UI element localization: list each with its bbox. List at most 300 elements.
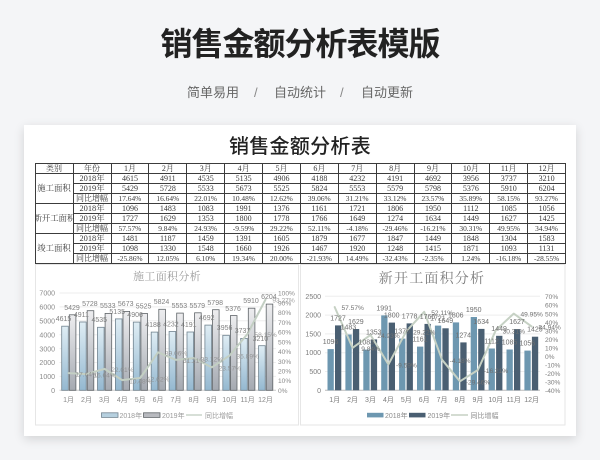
data table: 19.34% (232, 254, 255, 263)
right axis: 40% (278, 349, 291, 356)
data table: 57.57% (119, 224, 141, 233)
data table: 1425 (539, 214, 555, 223)
data table: 1131 (539, 244, 554, 253)
data table: 4615 (122, 174, 138, 183)
data table: 同比增幅 (76, 224, 108, 233)
data table: 1056 (539, 204, 555, 213)
month axis: 2月 (81, 396, 92, 404)
data labels 2018: 4535 (92, 317, 107, 324)
subtitle: features: 自动统计 (274, 85, 326, 100)
data table: 类别 (46, 164, 62, 173)
data labels growth: 57.57% (342, 305, 364, 312)
data table: -2.35% (422, 254, 444, 263)
gridlines and left axis (39, 290, 276, 395)
data labels 2019: 5533 (100, 303, 116, 310)
month axis: 3月 (365, 396, 376, 404)
month axis: 8月 (455, 396, 465, 404)
data labels growth: -4.18% (450, 358, 471, 365)
data labels 2019: 5728 (82, 301, 98, 308)
data labels 2018: 5135 (109, 309, 125, 316)
right axis: 60% (545, 303, 558, 310)
data table: 1376 (273, 204, 289, 213)
data table: 5673 (236, 184, 252, 193)
month axis: 7月 (171, 396, 181, 404)
data table: 1467 (311, 244, 327, 253)
month axis: 10月 (222, 396, 237, 404)
subtitle: features: 自动更新 (361, 85, 413, 100)
month axis (329, 396, 539, 404)
data labels 2019: 5525 (136, 304, 151, 310)
data labels 2018 (56, 309, 268, 343)
title: 销售金额分析表模版 (160, 26, 440, 62)
data labels growth: 30.31% (503, 328, 525, 336)
data labels 2019: 1778 (402, 314, 417, 320)
data table: 1093 (501, 244, 517, 253)
data labels 2018: 4232 (163, 322, 179, 328)
data labels growth: 34.94% (538, 324, 561, 332)
data table: 1879 (311, 234, 327, 243)
data labels growth: 35.89% (237, 354, 259, 360)
data table: 1727 (122, 214, 138, 223)
data table: 1677 (349, 234, 365, 243)
month axis: 11月 (507, 396, 521, 404)
right axis: 60% (278, 330, 291, 336)
month axis: 4月 (117, 396, 128, 404)
data labels 2018: 4906 (127, 312, 143, 319)
gridlines and left axis: 0 (51, 388, 55, 395)
right axis: 100% (278, 290, 295, 298)
legend: 2019年 (428, 411, 450, 420)
right axis: -10% (545, 362, 561, 369)
data labels growth: 31.21% (183, 358, 205, 365)
data labels growth: -16.21% (484, 368, 508, 375)
data labels growth: 39.06% (165, 350, 187, 358)
data table: -16.21% (420, 224, 446, 233)
data table: 2018年 (79, 204, 105, 213)
data table: 12.05% (156, 254, 179, 263)
data labels growth: 22.01% (111, 367, 134, 374)
data labels growth: 12.62% (147, 376, 170, 384)
data table: 4188 (311, 174, 327, 183)
data labels 2019: 1425 (527, 327, 543, 334)
legend: 同比增幅 (470, 411, 498, 420)
month axis: 6月 (419, 396, 430, 404)
data table: 同比增幅 (76, 194, 108, 203)
data table: 5月 (275, 164, 287, 173)
data table: 1605 (273, 234, 289, 243)
chart title: 新开工面积分析: 新开工面积分析 (379, 270, 485, 287)
data table: 5798 (425, 184, 441, 193)
data table: 16.64% (156, 194, 179, 203)
data labels 2018: 4191 (181, 322, 197, 329)
right axis: 70% (545, 294, 558, 301)
data table: 1548 (198, 244, 214, 253)
data labels 2018: 3956 (217, 325, 232, 332)
data table: 1629 (160, 214, 176, 223)
month axis (63, 396, 273, 404)
subtitle: features (187, 85, 413, 100)
data table: 2018年 (79, 174, 105, 183)
data table: 5376 (463, 184, 479, 193)
right axis: 90% (278, 300, 291, 307)
month axis: 2月 (347, 396, 358, 404)
data labels 2018: 1950 (466, 307, 482, 314)
data table: 35.89% (459, 194, 482, 203)
data labels 2018: 1483 (341, 324, 356, 332)
data table: 4906 (273, 174, 289, 183)
data table: 6.10% (196, 254, 215, 263)
data table: 同比增幅 (76, 254, 108, 263)
data labels 2019: 1449 (491, 326, 507, 333)
data table: 49.95% (497, 224, 520, 233)
month axis: 1月 (63, 396, 74, 404)
data table: 5824 (311, 184, 327, 193)
data table: 24.93% (194, 224, 217, 233)
month axis: 6月 (153, 396, 164, 404)
data labels growth: -29.46% (466, 380, 490, 386)
data labels 2019: 1727 (330, 316, 346, 322)
month axis: 9月 (472, 396, 483, 404)
panel: 新开工面积 chart (300, 264, 565, 425)
growth line (335, 307, 532, 381)
month axis: 4月 (383, 396, 394, 404)
data labels 2019: 5824 (154, 299, 169, 306)
data table: 1112 (463, 204, 479, 213)
data labels 2018: 1991 (376, 306, 392, 312)
data table: 1.24% (461, 254, 480, 263)
data labels 2018: 1112 (484, 338, 499, 346)
gridlines and left axis: 500 (309, 369, 321, 376)
data table: 52.11% (308, 224, 331, 233)
gridlines and left axis: 0 (317, 388, 321, 395)
bars 2019 (335, 323, 538, 390)
data labels 2019: 1766 (420, 314, 435, 321)
data table: 5579 (387, 184, 403, 193)
data labels 2019: 5579 (190, 303, 205, 310)
data table: 2019年 (79, 184, 105, 193)
data labels 2019: 5910 (243, 298, 259, 305)
data table: 1920 (349, 244, 365, 253)
right axis: -30% (545, 380, 561, 386)
right axis: 50% (545, 311, 558, 318)
data labels growth: 49.95% (521, 312, 543, 318)
data table: 10月 (463, 164, 479, 173)
month axis: 5月 (135, 396, 146, 404)
data table: 1391 (236, 234, 252, 243)
month axis: 11月 (240, 396, 255, 404)
right axis: 0% (545, 354, 555, 361)
data table: -25.86% (117, 254, 143, 263)
right axis: 30% (545, 328, 558, 335)
gridlines and left axis: 3000 (39, 346, 55, 354)
bars 2019 (69, 304, 273, 390)
data table: 1634 (425, 214, 441, 223)
data table: 1848 (463, 234, 479, 243)
data table: 1098 (122, 244, 138, 253)
data table: 1660 (236, 244, 252, 253)
data table: 3月 (200, 164, 212, 173)
right axis: 0% (278, 388, 288, 395)
data table: 17.64% (119, 194, 141, 203)
month axis: 12月 (258, 396, 273, 404)
data table: 3210 (539, 174, 555, 183)
data labels 2019: 1353 (366, 330, 382, 336)
data table: 1304 (501, 234, 517, 243)
data table: 12月 (539, 164, 555, 173)
data labels 2018: 1161 (412, 336, 428, 344)
month axis: 5月 (401, 396, 412, 404)
data table: 4232 (349, 174, 365, 183)
right axis: 30% (278, 359, 291, 366)
data table (35, 163, 566, 264)
data table: 1月 (124, 164, 136, 173)
data labels growth: 17.64% (75, 372, 98, 378)
data labels 2018: 1083 (359, 340, 374, 346)
data table: 93.27% (535, 194, 558, 203)
data labels 2019: 5429 (64, 305, 80, 312)
right axis: 70% (278, 320, 291, 327)
card heading: 销售金额分析表 (229, 136, 371, 158)
data table: 39.06% (308, 194, 331, 203)
subtitle: features: / (340, 85, 344, 100)
gridlines and left axis: 1500 (305, 332, 321, 338)
gridlines and left axis: 1000 (305, 350, 321, 357)
data labels 2018: 1376 (394, 328, 410, 336)
data table: 1330 (160, 244, 176, 253)
data table: 1274 (387, 214, 403, 223)
data table: 1083 (198, 204, 214, 213)
data labels 2018: 1721 (430, 316, 446, 322)
gridlines and left axis: 4000 (39, 332, 55, 340)
data table: 5525 (273, 184, 289, 193)
data labels growth: 9.84% (361, 346, 380, 353)
data table: 1085 (501, 204, 517, 213)
data labels growth: 52.11% (431, 310, 453, 317)
data labels growth: 93.27% (272, 298, 295, 304)
data table: 1483 (160, 204, 176, 213)
data table: 34.94% (535, 224, 558, 233)
gridlines and left axis: 2000 (39, 360, 55, 367)
subtitle: features: / (254, 85, 258, 100)
data table: 年份 (84, 164, 100, 173)
data table: 23.57% (422, 194, 444, 203)
gridlines and left axis: 6000 (39, 304, 55, 312)
data labels growth: 10.48% (129, 378, 152, 386)
right axis: 20% (545, 337, 558, 344)
data table: -21.93% (307, 254, 332, 263)
data labels 2018: 3210 (253, 336, 268, 343)
right axis: 80% (278, 310, 291, 317)
data table: 1353 (198, 214, 214, 223)
data labels 2018: 1085 (502, 340, 517, 346)
data labels growth: 23.57% (219, 366, 241, 372)
data labels 2019: 5798 (207, 300, 223, 307)
data labels 2018: 3737 (235, 328, 250, 335)
data labels 2018: 4911 (74, 312, 89, 319)
data labels growth (342, 305, 561, 386)
chart title: 施工面积分析: 施工面积分析 (133, 269, 201, 283)
legend (367, 411, 498, 420)
data table: 3737 (501, 174, 517, 183)
right axis: -40% (545, 388, 561, 395)
month axis: 7月 (437, 396, 448, 404)
data table: 1766 (311, 214, 327, 223)
data labels growth: 29.22% (413, 330, 436, 336)
data labels 2019: 1629 (348, 319, 364, 326)
data labels 2019: 1800 (384, 312, 400, 320)
data labels 2018 (323, 306, 535, 348)
data table: 3956 (463, 174, 479, 183)
bars 2018 (328, 315, 531, 390)
panel: 施工面积 chart (36, 264, 298, 425)
data table: 1096 (122, 204, 138, 213)
data table: 1806 (387, 204, 403, 213)
data table: 7月 (351, 164, 363, 173)
data table: 29.22% (270, 224, 293, 233)
data table: 5910 (501, 184, 517, 193)
data table: 10.48% (232, 194, 255, 203)
data table: 1950 (425, 204, 441, 213)
data table: -29.46% (382, 224, 408, 233)
month axis: 3月 (99, 396, 110, 404)
growth line (69, 300, 265, 380)
data table: -4.18% (346, 224, 368, 233)
data table: 33.12% (384, 194, 406, 203)
data table: 1627 (501, 214, 517, 223)
data table: 5135 (236, 174, 252, 183)
data table: 1871 (463, 244, 479, 253)
right axis (545, 294, 561, 395)
data labels 2019 (64, 294, 277, 313)
right axis: 20% (278, 368, 291, 375)
data labels 2019: 1274 (456, 332, 471, 340)
gridlines and left axis: 2500 (305, 294, 321, 301)
data labels 2019: 1627 (509, 319, 525, 326)
data table: 5553 (349, 184, 365, 193)
legend (102, 411, 233, 420)
data table: 2019年 (79, 214, 105, 223)
panel: white card (24, 125, 576, 436)
data table: 6204 (539, 184, 555, 193)
data table: 31.21% (346, 194, 369, 203)
bars 2018 (62, 319, 265, 390)
data table: 1721 (349, 204, 365, 213)
legend: 2018年 (120, 411, 142, 420)
right axis: 10% (278, 378, 291, 385)
data table: 5533 (198, 184, 214, 193)
data table: 9月 (427, 164, 439, 173)
data table: 1991 (236, 204, 252, 213)
data table: 1800 (236, 214, 252, 223)
data labels growth: 16.64% (93, 372, 116, 380)
data labels growth: 58.15% (254, 332, 277, 339)
data table: 20.00% (270, 254, 293, 263)
gridlines and left axis: 5000 (39, 318, 55, 326)
data table: 4692 (425, 174, 441, 183)
data labels 2019: 6204 (261, 294, 277, 301)
data table: 1449 (463, 214, 479, 223)
right axis (278, 290, 295, 395)
data table: 1161 (311, 204, 327, 213)
data labels 2018: 1096 (323, 339, 338, 346)
data table: 12.62% (270, 194, 293, 203)
data labels 2018: 4692 (199, 315, 215, 322)
month axis: 8月 (188, 396, 199, 404)
data labels growth (75, 298, 295, 386)
data table: 竣工面积 (37, 244, 71, 253)
data table: 1847 (387, 234, 403, 243)
data table: 4191 (387, 174, 403, 183)
data table: 施工面积 (37, 184, 71, 193)
data table: -16.18% (496, 254, 521, 263)
right axis: 40% (545, 320, 558, 327)
data labels 2019: 5673 (118, 301, 134, 308)
data labels 2018: 4188 (145, 322, 161, 329)
month axis: 1月 (329, 396, 340, 404)
month axis: 10月 (488, 396, 503, 404)
data table: 9.84% (158, 224, 177, 233)
data table: 11月 (501, 164, 517, 173)
data table: 1248 (387, 244, 403, 253)
data table: 1778 (273, 214, 289, 223)
data table: 1459 (198, 234, 214, 243)
data table: 1481 (122, 234, 138, 243)
data table: 6月 (313, 164, 325, 173)
right axis: -20% (545, 371, 561, 378)
data table: 4535 (198, 174, 214, 183)
data table: 22.01% (194, 194, 217, 203)
data table: -9.59% (233, 224, 254, 233)
data labels 2018: 1806 (448, 312, 464, 320)
data table: 5429 (122, 184, 138, 193)
legend: 2018年 (385, 411, 408, 420)
gridlines and left axis: 2000 (305, 313, 321, 320)
data table: 5728 (160, 184, 176, 193)
right axis: 10% (545, 345, 558, 352)
data labels 2019 (330, 312, 543, 340)
subtitle: features: 简单易用 (187, 85, 239, 100)
data table: 2019年 (79, 244, 105, 253)
data table: 58.15% (497, 194, 520, 203)
data table: 14.49% (346, 254, 369, 263)
data labels growth: 24.93% (377, 333, 400, 340)
data table: 4911 (160, 174, 176, 183)
data table: 2018年 (79, 234, 105, 243)
month axis: 9月 (206, 396, 217, 404)
right axis: 50% (278, 339, 291, 346)
data table: 1926 (273, 244, 289, 253)
data table: 1449 (425, 234, 441, 243)
data labels 2019: 5553 (172, 303, 187, 310)
data labels growth: 33.12% (201, 356, 223, 364)
data labels 2019: 1649 (438, 318, 453, 325)
gridlines and left axis (305, 294, 540, 395)
data table: 30.31% (459, 224, 482, 233)
data table: -32.43% (382, 254, 408, 263)
data labels 2018: 1056 (520, 340, 535, 348)
legend: 2019年 (162, 411, 185, 420)
data table: 1583 (539, 234, 555, 243)
data labels growth: -9.59% (396, 362, 417, 370)
data labels 2019: 5376 (225, 306, 241, 313)
month axis: 12月 (524, 396, 539, 404)
data table: 8月 (389, 164, 401, 173)
data labels 2019: 1634 (473, 319, 489, 326)
data table: 4月 (238, 164, 250, 173)
legend: 同比增幅 (205, 411, 233, 420)
data table: 1415 (425, 244, 441, 253)
data table: 1649 (349, 214, 365, 223)
